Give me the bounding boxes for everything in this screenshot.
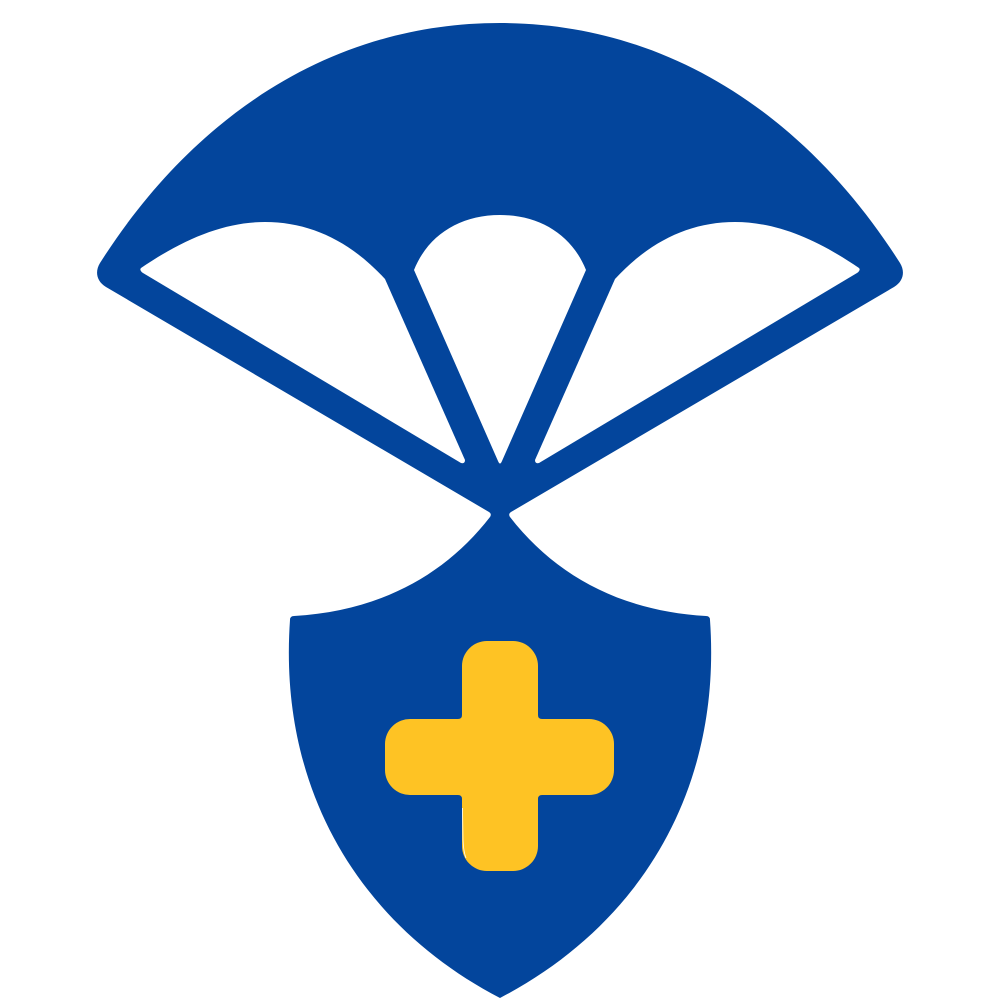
icon: parachute canopy and shield silhouette [97,23,903,998]
canopy opening: right panel [535,222,860,463]
icon: medical cross [385,641,614,871]
canopy opening: centre panel [414,215,586,464]
cross edge highlight [462,808,466,858]
canopy opening: left panel [140,222,465,463]
